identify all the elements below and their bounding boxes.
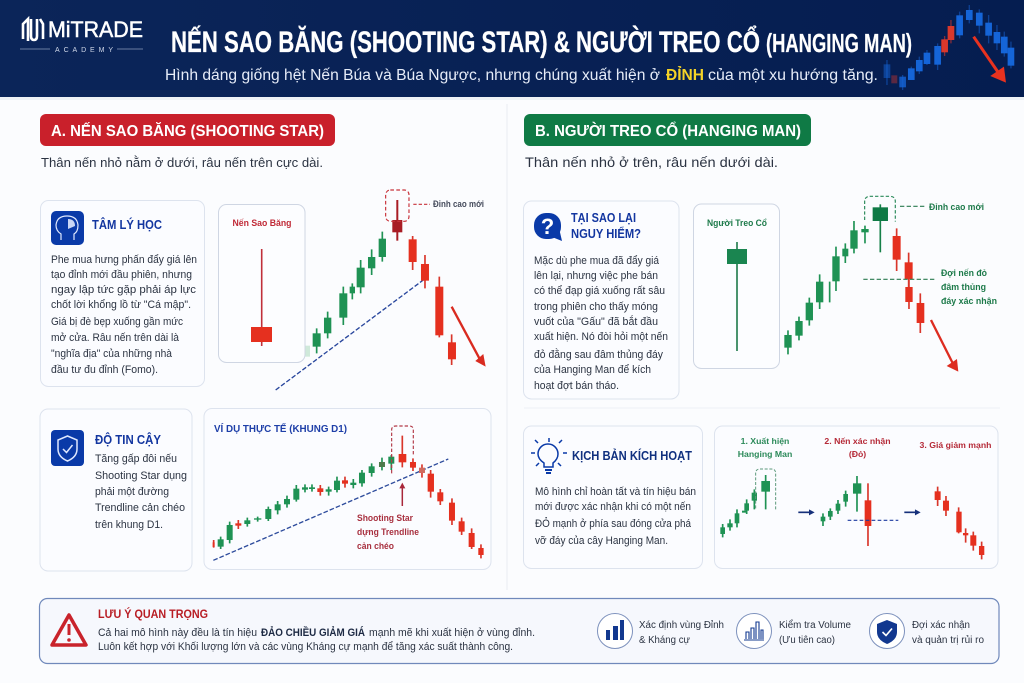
panel: candle người treo cổ <box>694 204 780 368</box>
section B heading <box>524 114 811 146</box>
chart: hanging man <box>694 196 997 372</box>
logo: MiTRADE <box>48 17 143 42</box>
text block: lên lại, nhưng việc phe bán <box>534 270 658 282</box>
text block: có thể đạp giá xuống rất sâu <box>534 285 665 297</box>
step 1: 1. Xuất hiện <box>741 436 789 446</box>
section B intro: Thân nến nhỏ ở trên, râu nến dưới dài. <box>525 154 778 170</box>
text block <box>535 486 696 547</box>
title: (HANGING MAN) <box>766 28 912 58</box>
item: đợi xác nhận: và quản trị rủi ro <box>912 634 984 646</box>
text block: Luôn kết hợp với Khối lượng lớn và các vùng Kháng cự mạnh để tăng xác suất thành công. <box>98 641 513 653</box>
text block: chốt lời khổng lồ từ "Cá mập". <box>51 299 191 311</box>
section A heading: A. NẾN SAO BĂNG (SHOOTING STAR) <box>51 121 324 140</box>
panel: ví dụ thực tế <box>204 408 491 570</box>
shooting star candle <box>392 200 402 241</box>
highlight box <box>392 426 413 473</box>
text block <box>95 453 187 531</box>
logo <box>20 17 143 54</box>
label: đợi nến đỏ: Đợi nến đỏ <box>941 268 987 279</box>
item: đợi xác nhận <box>870 614 984 648</box>
text block: Mô hình chỉ hoàn tất và tín hiệu bán <box>535 486 696 498</box>
step 2: (Đỏ) <box>849 449 866 459</box>
text block: ĐẢO CHIỀU GIẢM GIÁ <box>261 626 365 639</box>
subtitle: ĐỈNH <box>666 67 704 84</box>
item: xác định vùng đỉnh <box>598 614 724 648</box>
text block <box>98 626 535 653</box>
section B heading: B. NGƯỜI TREO CỔ (HANGING MAN) <box>535 121 801 140</box>
text block: Mặc dù phe mua đã đẩy giá <box>534 255 659 267</box>
item: kiểm tra volume: (Ưu tiên cao) <box>779 635 835 646</box>
text block: đầu tư đu đỉnh (Fomo). <box>51 364 158 376</box>
section A intro: Thân nến nhỏ nằm ở dưới, râu nến trên cực dài. <box>41 155 323 170</box>
green candles <box>784 221 869 354</box>
panel: lưu ý quan trọng <box>40 598 999 664</box>
panel: lưu ý quan trọng: LƯU Ý QUAN TRỌNG <box>98 608 208 621</box>
text block: Shooting Star dụng <box>95 470 187 482</box>
step 2 <box>821 436 898 546</box>
arrow: down <box>931 320 958 372</box>
green candles <box>305 232 386 357</box>
text block <box>51 254 197 376</box>
panel: tâm lý học: TÂM LÝ HỌC <box>92 217 162 232</box>
step 2: 2. Nến xác nhận <box>824 436 891 446</box>
text block: ngay lập tức gặp phải áp lực <box>51 284 197 296</box>
label: đợi nến đỏ <box>941 268 997 307</box>
heading: NGUY HIỂM? <box>571 226 641 241</box>
text block: "nghĩa địa" của những nhà <box>51 348 172 360</box>
subtitle <box>165 67 878 84</box>
text block: phải một đường <box>95 486 169 498</box>
text block: xuất hiện. Nó đòi hỏi một nến <box>534 331 668 343</box>
icon: question bubble: ? <box>541 214 554 239</box>
label: đỉnh cao mới: Đỉnh cao mới <box>433 199 484 209</box>
text block: Cả hai mô hình này đều là tín hiệu <box>98 627 257 639</box>
label: đợi nến đỏ: đáy xác nhận <box>941 296 997 307</box>
text block: ĐỎ mạnh ở phía sau đóng cửa phá <box>535 517 691 530</box>
panel: độ tin cậy <box>40 409 192 571</box>
panel: tại sao lại nguy hiểm <box>524 201 679 399</box>
panel: tâm lý học <box>40 200 204 386</box>
heading <box>571 211 641 241</box>
candlestick chart <box>213 426 484 560</box>
panel: candle nến sao băng: Nến Sao Băng <box>232 218 292 229</box>
item: đợi xác nhận: Đợi xác nhận <box>912 620 970 631</box>
callout: dựng Trendline <box>357 527 419 537</box>
item: xác định vùng đỉnh: Xác định vùng Đỉnh <box>639 619 724 631</box>
text block: đỏ đằng sau đâm thủng đáy <box>534 348 664 361</box>
arrow: down <box>452 307 486 367</box>
callout: Shooting Star <box>357 513 413 523</box>
icon: light bulb <box>531 438 567 473</box>
item: xác định vùng đỉnh: & Kháng cự <box>639 635 690 646</box>
hanging man candle <box>873 204 888 252</box>
title: NẾN SAO BĂNG (SHOOTING STAR) & NGƯỜI TREO CỔ <box>171 25 760 59</box>
heading: TẠI SAO LẠI <box>571 211 636 225</box>
text block: hoạt đợt bán tháo. <box>534 380 619 392</box>
label: đỉnh cao mới: Đỉnh cao mới <box>929 202 984 213</box>
text block: mở cửa. Râu nến trên dài là <box>51 332 179 344</box>
header banner <box>0 0 1024 97</box>
icon: shield <box>51 430 84 466</box>
text block: Giá bị đè bẹp xuống gần mức <box>51 316 184 328</box>
panel: ví dụ thực tế: VÍ DỤ THỰC TẾ (KHUNG D1) <box>214 422 347 435</box>
step 3: 3. Giá giảm mạnh <box>920 440 991 450</box>
text block: Phe mua hưng phấn đẩy giá lên <box>51 254 197 266</box>
text block: vuốt của "Gấu" đã bắt đầu <box>534 315 658 328</box>
chart: shooting star <box>218 190 486 390</box>
text block: mạnh mẽ khi xuất hiện ở vùng đỉnh. <box>369 627 535 639</box>
panel: độ tin cậy: ĐỘ TIN CẬY <box>95 432 162 447</box>
panel: kịch bản kích hoạt: KỊCH BẢN KÍCH HOẠT <box>572 448 692 463</box>
section A heading <box>40 114 335 146</box>
subtitle: của một xu hướng tăng. <box>708 67 878 84</box>
panel: candle nến sao băng <box>218 204 305 362</box>
logo: ACADEMY <box>55 47 113 54</box>
highlight box <box>386 190 409 221</box>
text block: của Hanging Man để kích <box>534 364 651 376</box>
panel: three steps <box>714 426 998 568</box>
subtitle: Hình dáng giống hệt Nến Búa và Búa Ngược, nhưng chúng xuất hiện ở <box>165 67 660 84</box>
red candles <box>409 236 456 365</box>
text block: Trendline cản chéo <box>95 502 185 514</box>
arrow: step 1 to 2 <box>798 509 815 515</box>
text block <box>534 255 668 392</box>
arrow: step 2 to 3 <box>904 509 921 515</box>
panel: candle người treo cổ: Người Treo Cổ <box>707 218 767 229</box>
text block: Tăng gấp đôi nếu <box>95 453 177 465</box>
text block: vỡ đáy của cây Hanging Man. <box>535 535 668 547</box>
icon: warning <box>52 615 86 645</box>
header chart decoration <box>884 5 1014 90</box>
text block: tạo đỉnh mới đầu phiên, nhưng <box>51 269 192 281</box>
panel: kịch bản kích hoạt <box>524 426 702 568</box>
step 3 <box>920 440 991 559</box>
red candles <box>893 228 924 333</box>
arrow: up <box>399 483 405 506</box>
icon: brain head <box>51 211 84 245</box>
step 1: Hanging Man <box>738 449 792 459</box>
text block: trên khung D1. <box>95 519 163 531</box>
item: kiểm tra volume <box>736 614 851 648</box>
trend line <box>276 280 423 390</box>
text block: trong phiên cho thấy móng <box>534 301 658 313</box>
step 1 <box>720 436 792 537</box>
label: đợi nến đỏ: đâm thủng <box>941 282 986 293</box>
callout: cản chéo <box>357 541 394 551</box>
callout <box>357 513 419 551</box>
text block: mới được xác nhận khi có một nến <box>535 501 691 513</box>
item: kiểm tra volume: Kiểm tra Volume <box>779 619 851 631</box>
highlight box <box>865 196 895 222</box>
icon: question bubble <box>534 213 562 241</box>
